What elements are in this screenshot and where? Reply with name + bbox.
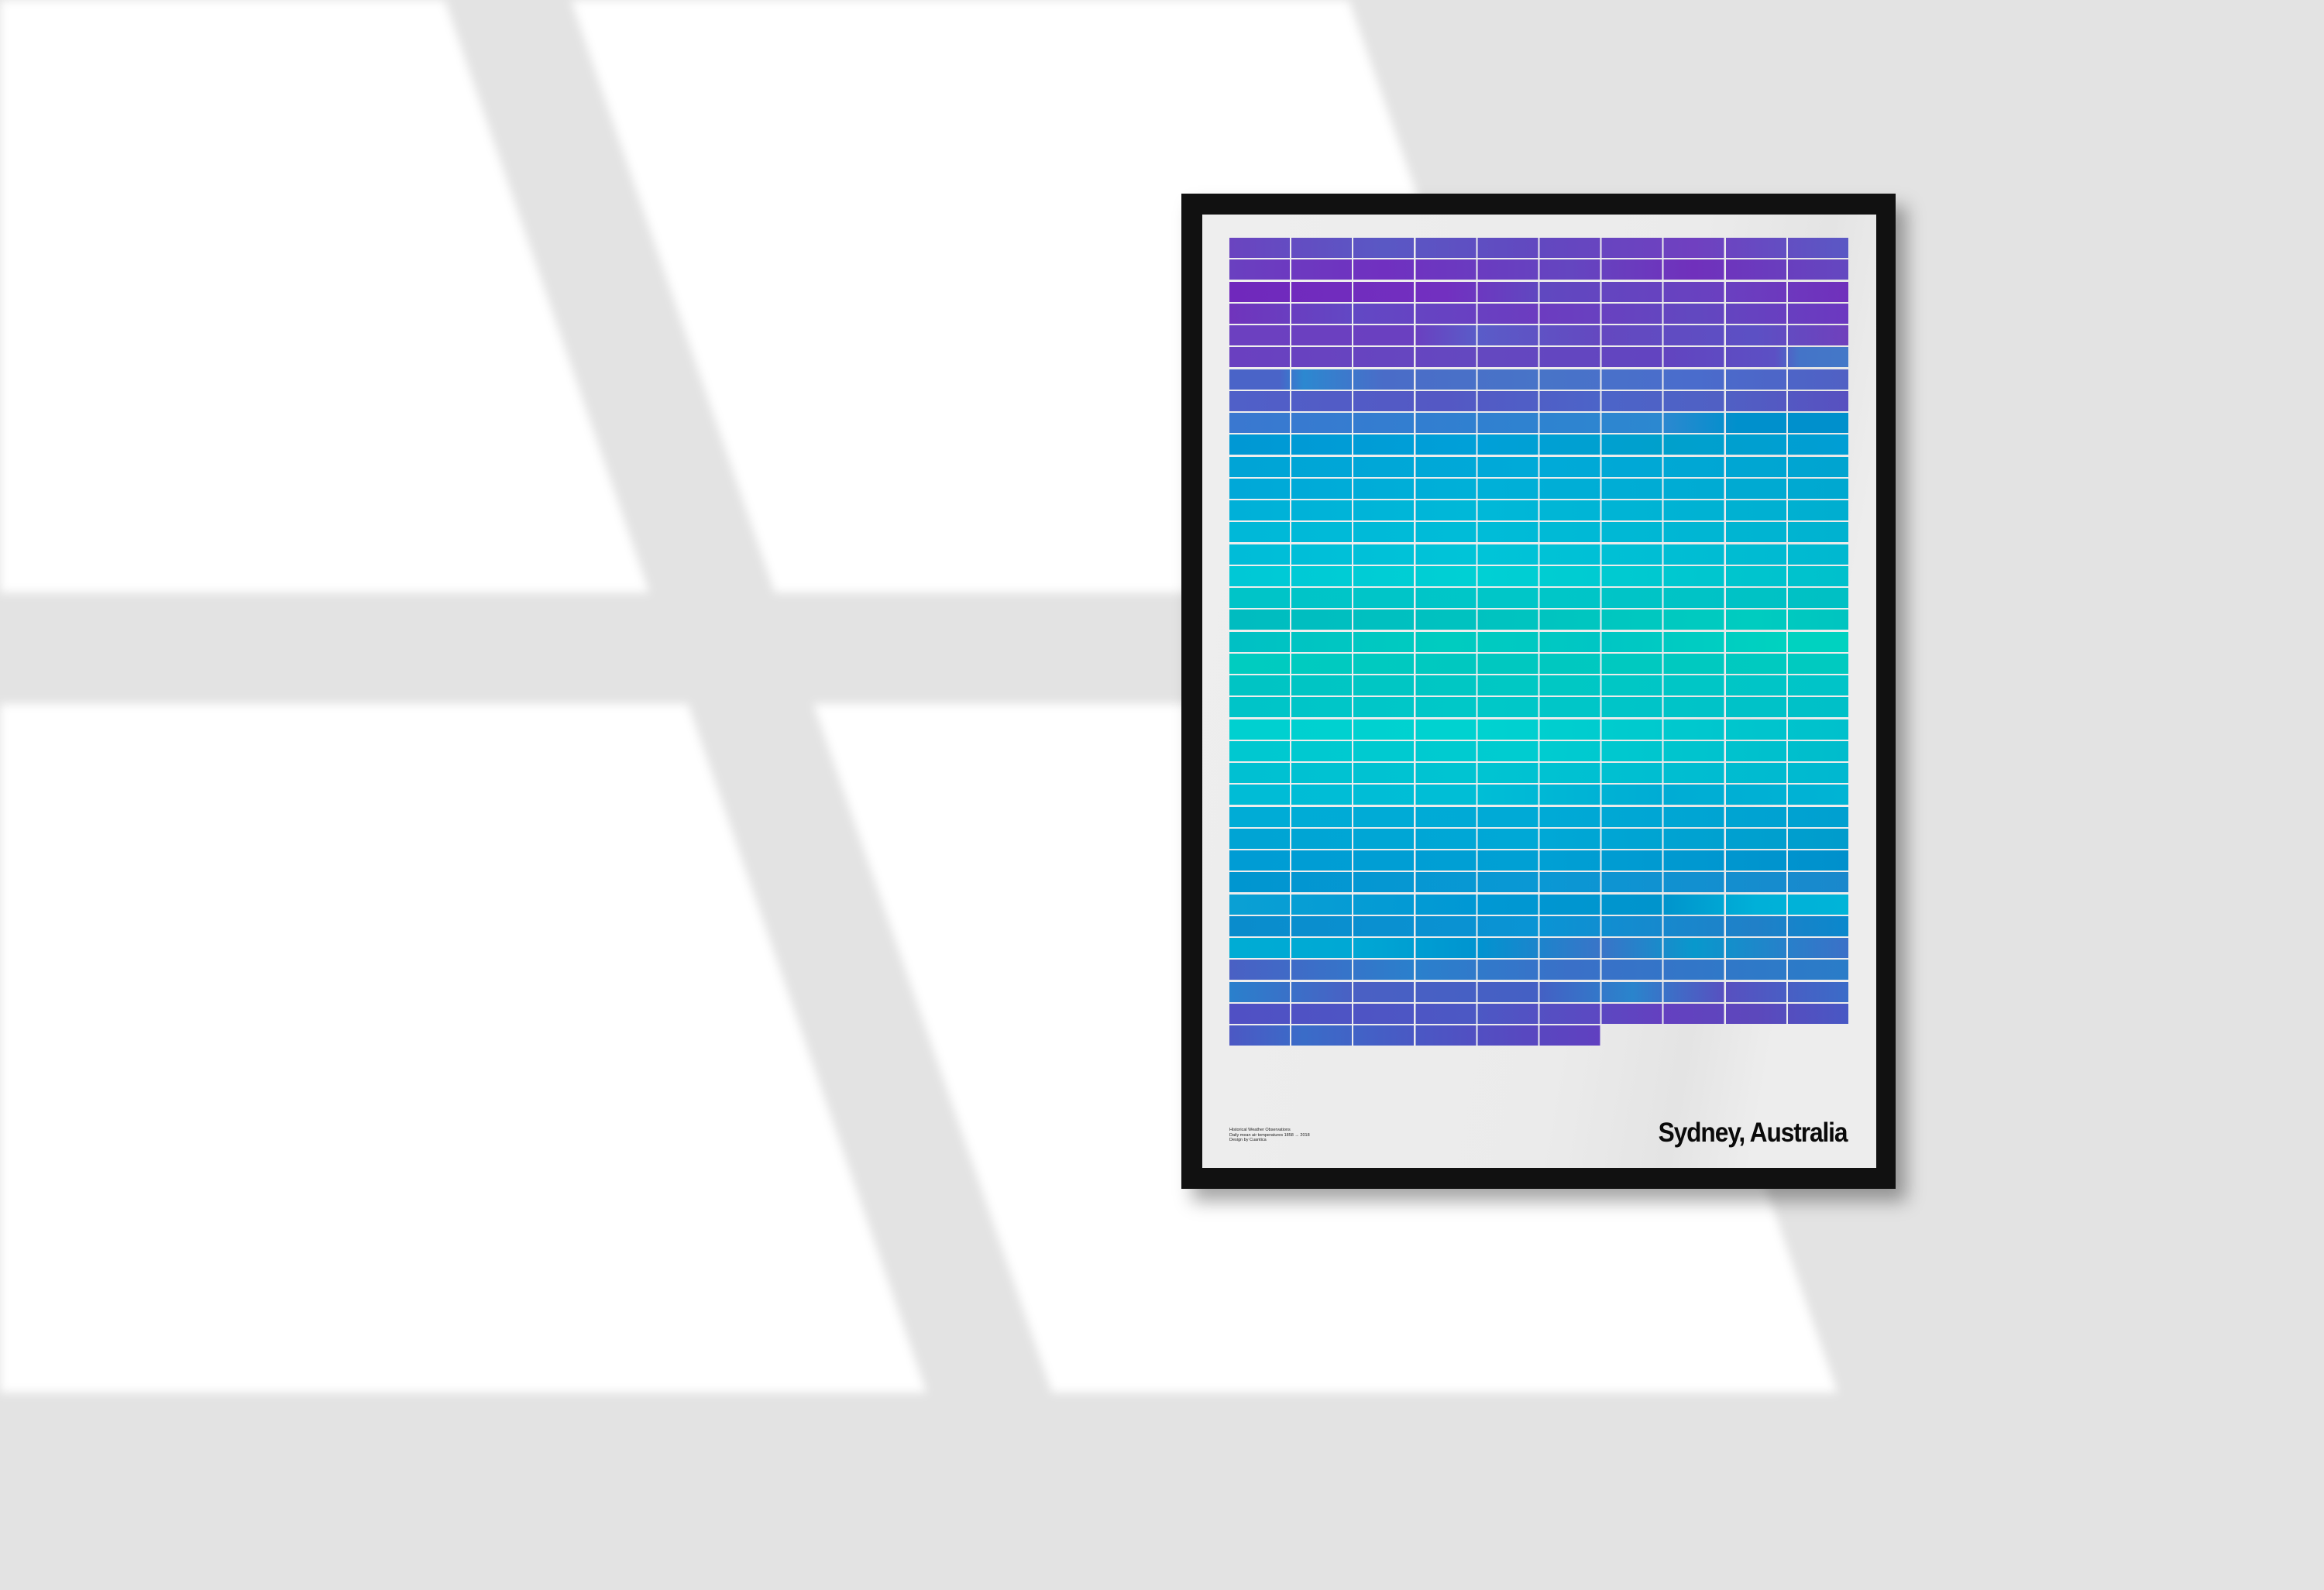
temperature grid (1229, 238, 1848, 1046)
poster frame (1181, 194, 1896, 1189)
credits text block (1229, 1128, 1310, 1142)
credits text block: Historical Weather Observations (1229, 1128, 1291, 1132)
credits text block: Daily mean air temperatures 1858 → 2018 (1229, 1132, 1310, 1137)
title: Sydney, Australia: Sydney, Australia (1658, 1118, 1847, 1148)
poster paper (1202, 215, 1876, 1168)
credits text block: Design by Cuantica (1229, 1138, 1267, 1142)
